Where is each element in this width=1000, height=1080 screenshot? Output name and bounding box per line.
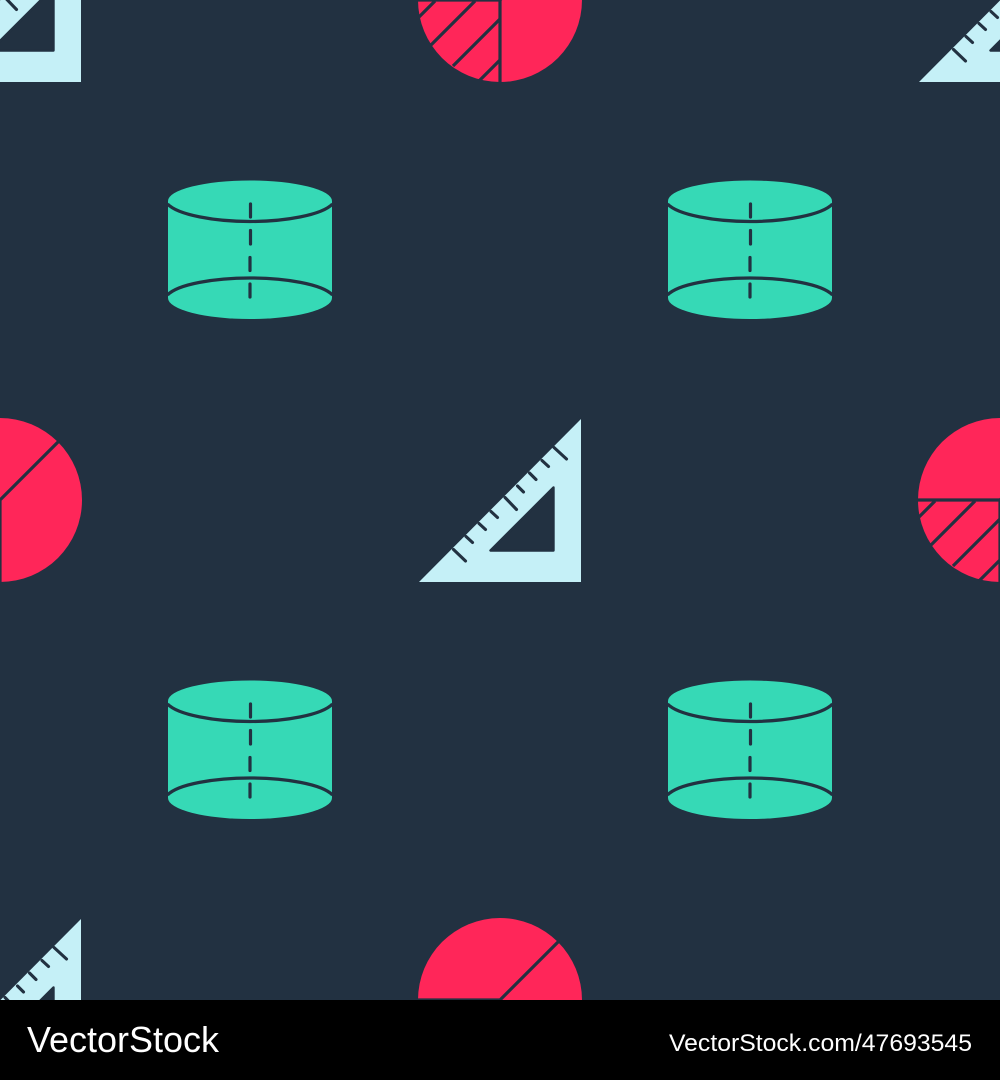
icon: cylinder top right — [668, 180, 832, 319]
icon: set square top right corner — [919, 0, 1000, 82]
footer bar — [0, 1000, 1000, 1080]
icon: set square top left corner — [0, 0, 81, 82]
icon: cylinder bottom left — [168, 680, 332, 819]
footer logo text: VectorStock — [27, 1019, 220, 1060]
footer image id text: VectorStock.com/47693545 — [669, 1030, 972, 1057]
icon: pie circle left — [0, 418, 82, 583]
icon: set square center — [419, 419, 581, 582]
icon: cylinder top left — [168, 180, 332, 319]
icon: set square bottom left corner — [0, 919, 81, 1080]
icon: pie circle bottom — [417, 918, 582, 1080]
icon: cylinder bottom right — [668, 680, 832, 819]
icon: pie circle top — [417, 0, 582, 83]
icon: pie circle right — [917, 418, 1000, 583]
